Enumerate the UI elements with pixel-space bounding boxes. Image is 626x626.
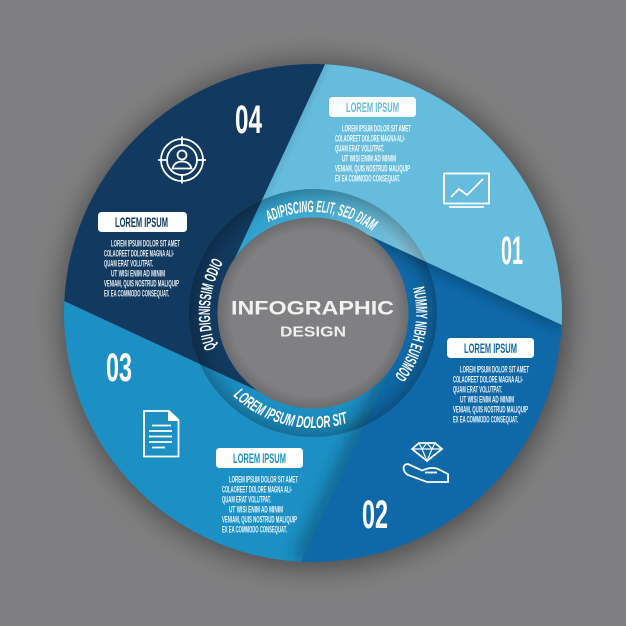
title: DESIGN [280,324,346,340]
centre circle [218,218,408,408]
ring label 04: QUI DIGNISSIM ODIO [198,258,222,350]
body text 01: QUAM ERAT VOLUTPAT. [335,144,384,154]
ring label 01: ADIPISCING ELIT, SED DIAM [266,200,379,231]
body text 02 [453,364,529,426]
label 01 [329,97,416,117]
panel text 02: COLAOREET DOLORE MAGNA ALI- [453,374,523,386]
segment 04 [64,64,325,391]
panel text 03 [216,448,303,536]
ring label 02: NUMMY NIBH EUISMOD [396,286,428,382]
panel text 01: COLAOREET DOLORE MAGNA ALI- [335,134,405,144]
number 04: 04 [235,98,262,142]
panel text 02: LOREM IPSUM [464,341,517,356]
body text 04: QUAM ERAT VOLUTPAT. [104,258,153,270]
text: VENIAM, QUIS NOSTRUD MALIQUIP [222,514,297,526]
body text 01: EX EA COMMODO CONSEQUAT. [335,174,400,184]
label 03 [216,448,303,468]
segment 03 [64,301,391,562]
text: LOREM IPSUM DOLOR SIT AMET [342,124,411,134]
segment 01 [235,64,562,325]
ring label 03: LOREM IPSUM DOLOR SIT [233,388,346,428]
text: VENIAM, QUIS NOSTRUD MALIQUIP [453,404,528,416]
title: INFOGRAPHIC [231,298,394,320]
body text 02: QUAM ERAT VOLUTPAT. [453,384,502,396]
text: 01 [501,229,523,273]
body text 04: EX EA COMMODO CONSEQUAT. [104,288,169,300]
label 02 [447,338,534,358]
body text 01: UT WISI ENIM AD MINIM [342,154,396,164]
body text 01 [335,124,411,184]
panel text 03: LOREM IPSUM [233,451,286,466]
ring shading [189,189,437,437]
body text 02: UT WISI ENIM AD MINIM [460,394,514,406]
wheel [64,64,562,562]
panel text 04: LOREM IPSUM [115,215,168,230]
icon: document [144,411,178,456]
number 03: 03 [106,346,132,390]
body text 03: EX EA COMMODO CONSEQUAT. [222,524,287,536]
panel text 04: LOREM IPSUM DOLOR SIT AMET [111,238,180,250]
title [231,298,394,340]
body text 02: EX EA COMMODO CONSEQUAT. [453,414,518,426]
segment 02 [301,235,562,562]
text: LOREM IPSUM DOLOR SIT AMET [460,364,529,376]
icon: monitor chart [444,174,489,207]
label 04 [98,212,187,232]
text: VENIAM, QUIS NOSTRUD MALIQUIP [335,164,410,174]
panel text 02 [447,338,534,426]
icon: diamond in hand [404,443,448,482]
body text 04 [104,238,180,300]
number 02: 02 [362,493,388,537]
body text 03: QUAM ERAT VOLUTPAT. [222,494,271,506]
text: LOREM IPSUM DOLOR SIT AMET [229,474,298,486]
panel text 03: COLAOREET DOLORE MAGNA ALI- [222,484,292,496]
panel text 04 [98,212,187,300]
body text 03 [222,474,298,536]
panel text 01: LOREM IPSUM [346,100,399,115]
panel text 04: COLAOREET DOLORE MAGNA ALI- [104,248,174,260]
body text 04: UT WISI ENIM AD MINIM [111,268,165,280]
wheel shadow [62,62,568,568]
panel text 04: VENIAM, QUIS NOSTRUD MALIQUIP [104,278,179,290]
panel text 01 [329,97,416,184]
icon: target person [158,136,206,184]
body text 03: UT WISI ENIM AD MINIM [229,504,283,516]
